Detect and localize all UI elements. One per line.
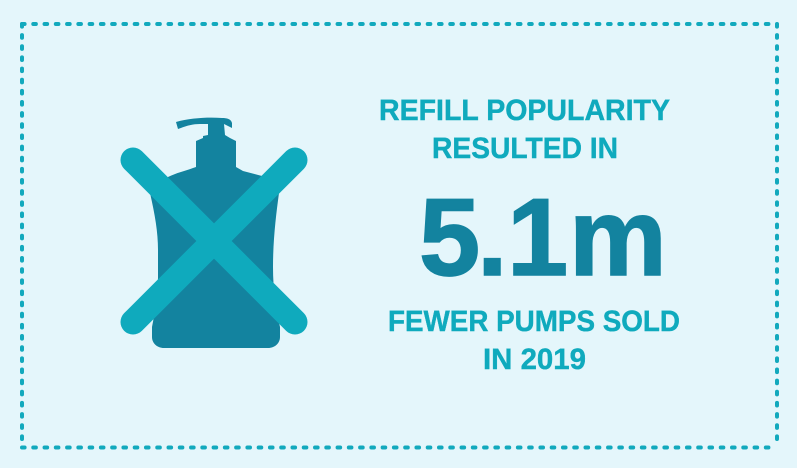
icon: crossed-out pump bottle <box>133 118 295 348</box>
caption line 1: FEWER PUMPS SOLD <box>388 305 680 338</box>
big number: 5.1m <box>419 176 667 299</box>
icon: pump bottle <box>150 118 280 348</box>
caption line 2: IN 2019 <box>483 343 586 376</box>
heading line 1: REFILL POPULARITY <box>379 94 670 127</box>
heading line 2: RESULTED IN <box>432 132 618 165</box>
icon: X mark <box>133 160 295 322</box>
